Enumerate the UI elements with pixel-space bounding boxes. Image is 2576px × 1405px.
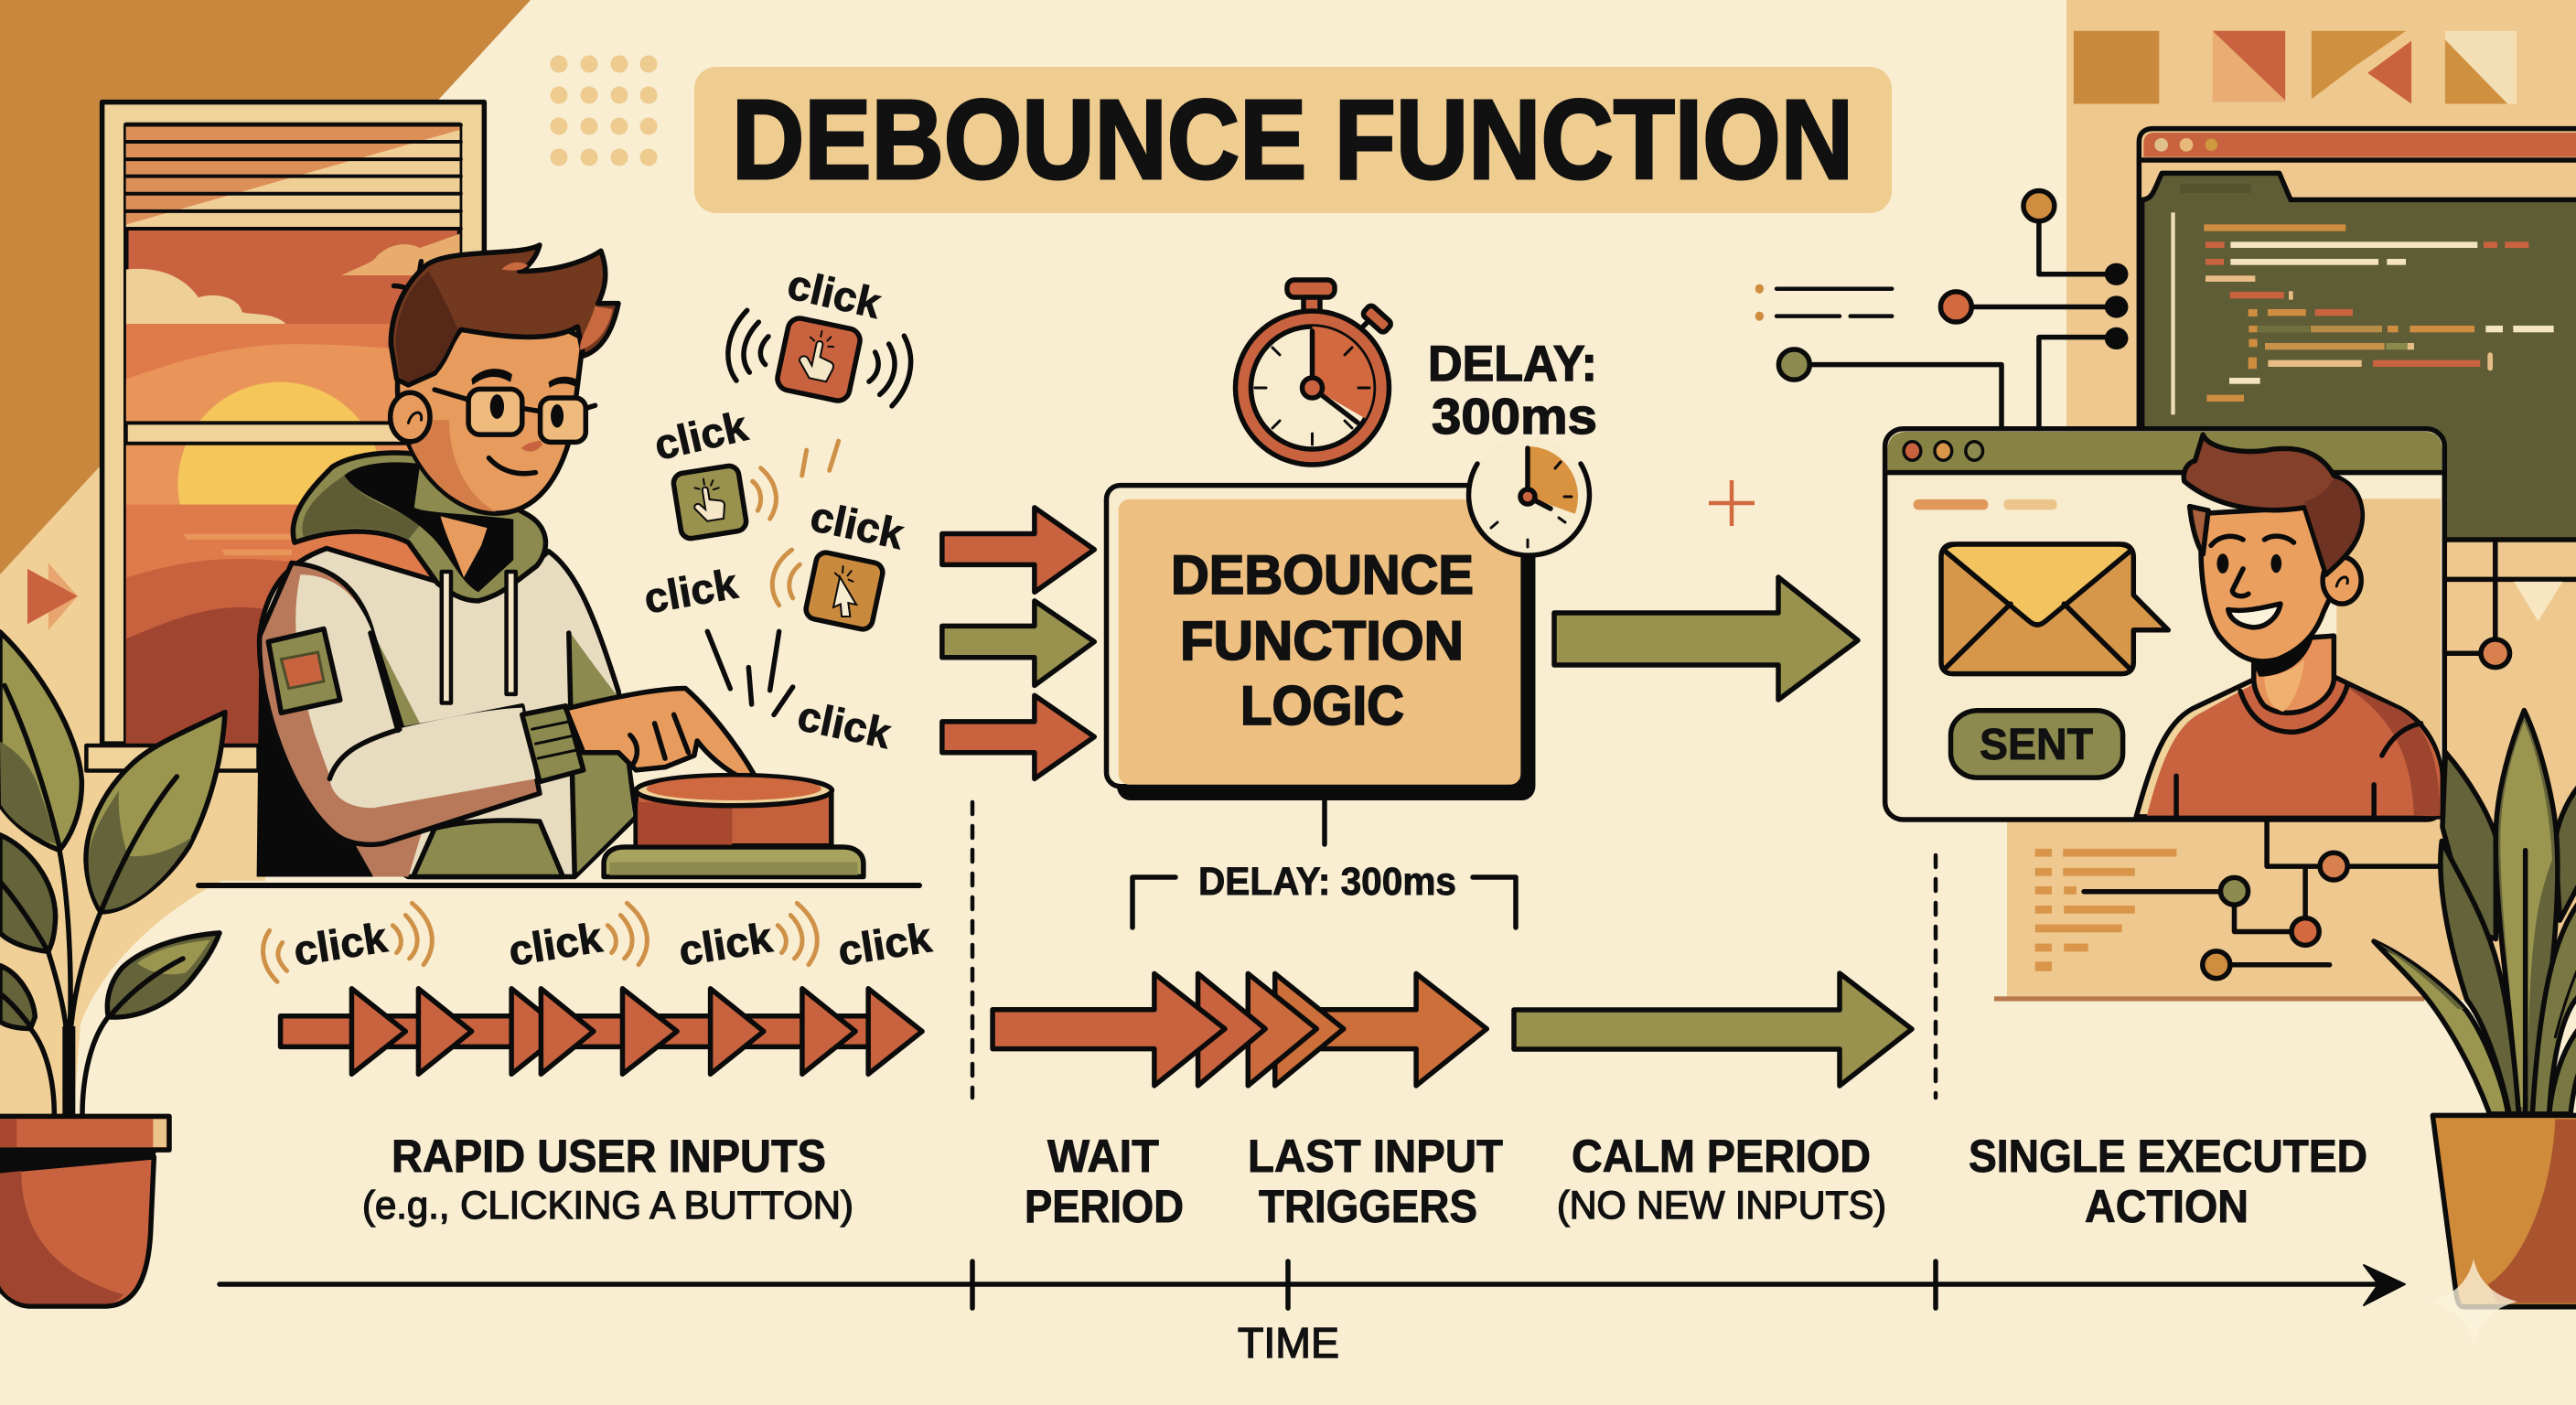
front left leaf <box>2441 841 2518 1114</box>
rapid input arrows <box>281 989 922 1074</box>
time axis <box>220 1261 2405 1308</box>
label: wait period: WAIT <box>1047 1131 1159 1182</box>
click row with ripples: click <box>675 913 776 975</box>
phase divider: right <box>1934 855 1937 1098</box>
icon: green click button <box>672 465 747 540</box>
hoodie center fold lines <box>569 633 574 875</box>
click row with ripples: click <box>290 913 391 975</box>
delay label <box>1428 335 1597 445</box>
sent button <box>1951 711 2123 778</box>
hoodie pouch <box>413 820 563 877</box>
background: right peach panel <box>2007 0 2576 1000</box>
label: wait period <box>1025 1131 1184 1232</box>
pot <box>0 1116 169 1306</box>
hoodie strings <box>442 572 516 703</box>
ripples around first click <box>728 310 911 406</box>
delay bracket <box>1132 800 1516 928</box>
circuit lines upper <box>1755 191 2562 668</box>
click row with ripples: click <box>505 913 606 975</box>
background: peach wedge left <box>0 284 265 1121</box>
label: calm period: (NO NEW INPUTS) <box>1557 1184 1886 1228</box>
label: rapid user inputs <box>362 1131 853 1228</box>
right potted plant <box>2374 711 2576 1307</box>
decorative tiles top right <box>2074 31 2517 104</box>
character: person pressing button <box>257 245 864 877</box>
left potted plant <box>0 632 225 1306</box>
debounce function logic box <box>1107 486 1535 800</box>
click label: click <box>794 692 896 757</box>
label: time: TIME <box>1238 1319 1339 1367</box>
browser window: email sent <box>1885 429 2444 820</box>
plus mark <box>1709 480 1755 526</box>
icon: stopwatch <box>1235 280 1392 465</box>
label: single executed action <box>1969 1131 2367 1232</box>
glasses <box>468 389 522 434</box>
central leaf <box>2496 711 2558 1114</box>
character: happy person <box>2136 434 2442 817</box>
click labels: click <box>783 260 886 327</box>
phase divider: left <box>971 802 974 1098</box>
label: last input triggers: TRIGGERS <box>1259 1181 1477 1232</box>
debounce function logic box: FUNCTION <box>1180 610 1464 671</box>
debounce function logic box: LOGIC <box>1240 675 1404 736</box>
sent label: SENT <box>1980 721 2093 769</box>
click label: click <box>807 492 908 558</box>
eyes and smile <box>2216 553 2228 574</box>
input arrows <box>942 508 1094 778</box>
hoodie back shadow <box>257 618 373 877</box>
big red button <box>604 776 864 877</box>
hair <box>391 245 618 385</box>
leaf: upper <box>0 632 81 851</box>
hoodie right side shade <box>569 633 633 875</box>
watermark sparkle <box>2430 1259 2517 1345</box>
head <box>391 245 618 513</box>
leaf: middle left <box>0 835 56 951</box>
back leaves <box>2442 752 2576 939</box>
low side leaf <box>2374 941 2508 1114</box>
background: orange corner <box>0 0 531 574</box>
delay label: 300ms <box>1432 388 1597 445</box>
delay label: DELAY: <box>1428 335 1597 391</box>
hoodie torso <box>260 548 636 877</box>
face <box>2201 508 2331 661</box>
title: DEBOUNCE FUNCTION <box>732 78 1853 203</box>
label: rapid user inputs: RAPID USER INPUTS <box>392 1131 826 1182</box>
plant stems <box>30 851 108 1117</box>
leaf: large <box>86 713 225 912</box>
decorative dot grid <box>551 55 657 166</box>
arrow decoration left <box>27 563 78 630</box>
label: last input triggers <box>1248 1131 1503 1232</box>
label: wait period: PERIOD <box>1025 1181 1184 1232</box>
arrow: red <box>942 695 1094 778</box>
ground line <box>199 883 919 888</box>
forearm cuff <box>522 706 584 782</box>
click label: click <box>649 402 752 469</box>
icon: orange cursor button <box>804 551 885 631</box>
icon: envelope <box>1941 544 2168 674</box>
arrow: olive <box>942 601 1094 685</box>
lower code panel <box>1994 818 2439 1002</box>
window with sunset <box>86 102 484 770</box>
leaf: lower left <box>0 966 35 1028</box>
orange ripples <box>753 441 839 606</box>
click burst group <box>707 310 911 714</box>
label: calm period: CALM PERIOD <box>1572 1131 1871 1182</box>
hoodie lower shade <box>356 829 423 877</box>
calm period arrow <box>1514 973 1912 1086</box>
pot <box>2432 1115 2576 1307</box>
click label: click <box>640 559 741 622</box>
leaf: small right <box>107 933 220 1017</box>
icon: red click button <box>776 316 862 402</box>
code editor window <box>2139 129 2576 579</box>
arrow: red <box>942 508 1094 592</box>
debounce function logic box: DEBOUNCE <box>1171 544 1474 606</box>
label: single executed action: SINGLE EXECUTED <box>1969 1131 2367 1182</box>
click row with ripples <box>263 903 935 981</box>
impact ticks <box>707 631 793 714</box>
hood <box>293 453 545 601</box>
hair <box>2184 434 2362 574</box>
label: last input triggers: LAST INPUT <box>1248 1131 1503 1182</box>
click row with ripples: click <box>834 913 935 975</box>
sleeve <box>260 563 540 844</box>
output arrow <box>1554 577 1858 700</box>
icon: small clock on box corner <box>1468 437 1590 556</box>
arm patch <box>268 629 340 713</box>
label: single executed action: ACTION <box>2085 1181 2249 1232</box>
label: calm period <box>1557 1131 1886 1228</box>
neck and collar <box>2254 636 2334 713</box>
hand <box>566 689 756 780</box>
right leaves <box>2532 902 2576 1114</box>
delay bracket: DELAY: 300ms <box>1198 860 1456 904</box>
label: rapid user inputs: (e.g., CLICKING A BUTTON) <box>362 1184 853 1228</box>
hoodie fold shade <box>373 633 423 730</box>
wait period arrows <box>993 973 1487 1086</box>
